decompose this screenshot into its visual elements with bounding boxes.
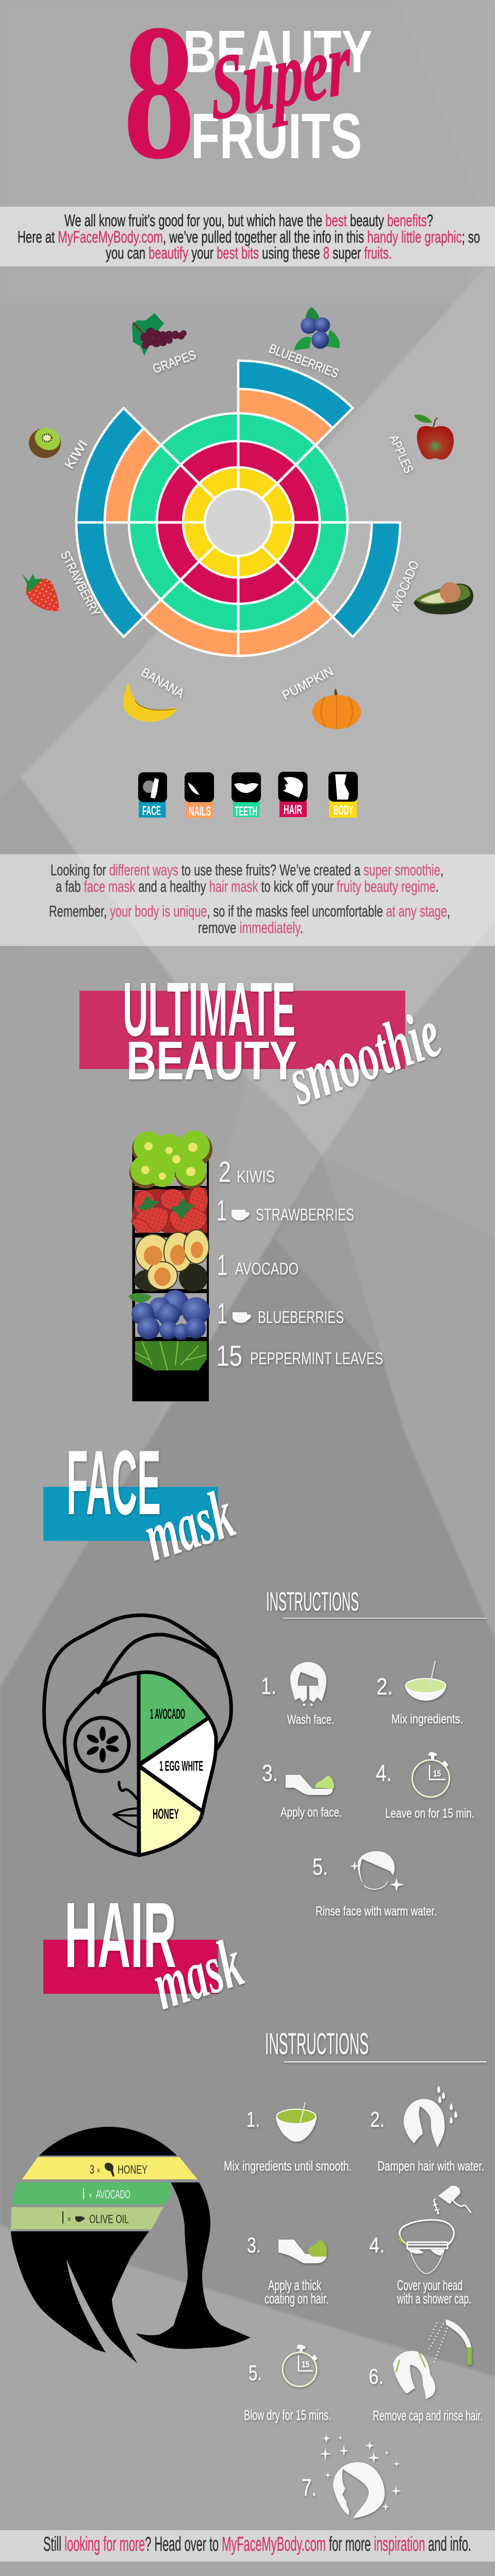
avocado layer [134,1230,209,1292]
icon: banana [123,682,177,722]
step 3 [262,1760,342,1820]
fruit labels [58,341,422,703]
smoothie ingredients: AVOCADO [235,1259,299,1278]
middle strip: a fab face mask and a healthy hair mask to kick off your fruity beauty regime. [56,877,439,895]
icon: avocado [414,582,473,614]
band: honey: HONEY [118,2163,147,2176]
middle strip: Looking for different ways to use these fruits? We’ve created a super smoothie, [51,861,443,879]
legend: hair [278,772,307,817]
ingredient labels: HONEY [153,1806,179,1822]
band: honey: x [97,2166,100,2174]
intro strip: We all know fruit’s good for you, but which have the best beauty benefits? [64,211,433,230]
legend: hair: HAIR [284,803,302,817]
legend [138,772,358,819]
title: Super [208,12,353,140]
kiwi layer [129,1131,212,1189]
step 4: 4. [376,1760,392,1786]
step 4: 15 [433,1769,441,1778]
icon: cup [233,1312,251,1323]
step 6 [369,2351,483,2424]
step 3 [247,2233,328,2307]
middle strip [0,854,495,946]
smoothie ingredients: STRAWBERRIES [256,1205,354,1224]
avocado outer bands [316,522,400,637]
step 4 [369,2220,471,2307]
nose [119,1782,137,1799]
ingredient labels [150,1706,203,1822]
title: BEAUTY [183,18,372,85]
smoothie ingredients: 1 [217,1297,227,1330]
step 3: coating on hair. [265,2291,328,2307]
face illustration: 1 EGG WHITE [159,1758,203,1774]
smoothie ingredients: 1 [217,1194,227,1227]
lips [113,1808,139,1828]
black hair [11,2127,251,2363]
icon: shower [428,2319,472,2365]
step 1 [224,2103,352,2174]
strawberry outer bands [76,522,161,637]
towel and face outline [44,1615,231,1779]
kiwi outer bands [76,408,161,522]
step 7: 7. [302,2474,317,2501]
legend: face [138,772,167,818]
step 5: 15 [302,2360,309,2369]
icon: kiwi [29,423,64,458]
icon: pumpkin [312,688,361,729]
legend: body: BODY [334,803,353,818]
band: avocado: AVOCADO [96,2188,130,2201]
step 1: Mix ingredients until smooth. [224,2158,352,2174]
smoothie ingredients: PEPPERMINT LEAVES [250,1349,383,1368]
band: olive oil: OLIVE OIL [89,2212,129,2226]
step 2: 2. [376,1673,393,1700]
legend: teeth: TEETH [235,804,257,819]
intro strip: you can beautify your best bits using these 8 super fruits. [106,244,392,262]
fruit labels: BLUEBERRIES [267,341,340,381]
band: avocado [12,2182,171,2205]
icon: blueberries [294,307,340,350]
icon: apple [414,415,454,460]
closing strip [0,2530,495,2562]
hair instructions: INSTRUCTIONS [265,2027,369,2061]
fruit labels: APPLES [387,433,416,476]
step 5: Rinse face with warm water. [316,1904,437,1919]
icon: grapes [132,313,187,355]
fruit labels: PUMPKIN [280,664,336,703]
face illustration [44,1615,231,1855]
icon: hair dryer [433,2185,471,2214]
step 7 [302,2434,402,2518]
band: olive oil: x [68,2215,71,2223]
blueberry layer [128,1290,210,1340]
blueberries outer bands [238,361,353,445]
step 5: 5. [249,2361,262,2385]
legend: nails: NAILS [189,804,211,819]
mint layer [135,1341,207,1370]
intro strip: Here at MyFaceMyBody.com, we’ve pulled together all the info in this handy little graphic; so [18,228,480,246]
fruit labels: STRAWBERRY [58,549,103,619]
band: olive oil [11,2207,163,2229]
legend: nails [185,772,214,819]
step 1 [261,1662,334,1727]
step 2 [376,1661,463,1726]
face mask heading: FACE [67,1431,161,1534]
middle strip: remove immediately. [198,919,303,937]
pumpkin and banana bands [144,600,333,656]
title [123,0,372,199]
step 5: 5. [312,1854,328,1880]
title: FRUITS [191,101,362,172]
legend: teeth [232,772,261,819]
step 1: Wash face. [287,1713,334,1727]
middle strip: Remember, your body is unique, so if the masks feel uncomfortable at any stage, [49,902,450,920]
step 4: 4. [369,2233,385,2257]
step 5: Blow dry for 15 mins. [244,2407,331,2423]
smoothie ingredients: KIWIS [237,1167,275,1186]
band: avocado: x [89,2191,92,2199]
legend: body [328,772,358,818]
face mask heading: mask [135,1476,243,1576]
smoothie ingredients: 1 [217,1249,227,1282]
intro strip [0,207,495,266]
smoothie ingredients: 15 [216,1340,242,1372]
smoothie glass [128,1131,212,1401]
step 5 [244,2345,331,2423]
fruit labels: AVOCADO [388,559,422,613]
step 2 [370,2086,484,2174]
band: honey [22,2157,197,2179]
step 4 [376,1752,474,1821]
smoothie heading: ULTIMATE [123,967,295,1052]
hair mask heading: mask [143,1924,252,2025]
face instructions [261,1587,487,1919]
fruit labels: GRAPES [151,348,198,377]
step 1: 1. [261,1673,276,1699]
hair mask heading [43,1884,252,2025]
radial chart [76,361,400,656]
icon: cup [232,1210,250,1221]
fruit labels: BANANA [139,665,187,701]
step 1: 1. [246,2107,260,2131]
icon: strawberry [22,574,59,611]
strawberry layer [131,1187,208,1233]
smoothie heading [79,967,450,1120]
step 5 [312,1851,437,1919]
smoothie ingredients [216,1156,383,1372]
fruit labels: KIWI [62,437,91,471]
ingredient labels: 1 AVOCADO [150,1706,185,1722]
step 2: 2. [370,2107,385,2131]
mask segment: avocado [139,1672,209,1765]
hair illustration [11,2127,251,2363]
step 3: 3. [247,2233,261,2257]
cucumber seeds [86,1726,120,1762]
step 2: Mix ingredients. [391,1712,463,1726]
band: honey: 3 [90,2163,94,2177]
mask segment: honey [139,1766,203,1855]
cucumber [75,1718,129,1771]
legend: face: FACE [142,804,161,818]
step 6: 6. [369,2364,384,2388]
hair mask heading: HAIR [64,1884,176,1987]
smoothie ingredients: BLUEBERRIES [258,1308,344,1327]
hair instructions [224,2027,487,2518]
smoothie ingredients: 2 [219,1156,231,1189]
face instructions: INSTRUCTIONS [266,1587,359,1616]
closing strip: Still looking for more? Head over to MyFaceMyBody.com for more inspiration and info. [43,2533,471,2555]
smoothie heading: BEAUTY [126,1030,297,1091]
step 3: 3. [262,1760,278,1786]
face mask heading [43,1431,243,1576]
step 3: Apply a thick [268,2277,322,2293]
mask segment: egg white [139,1718,216,1811]
step 3: Apply on face. [280,1805,342,1820]
